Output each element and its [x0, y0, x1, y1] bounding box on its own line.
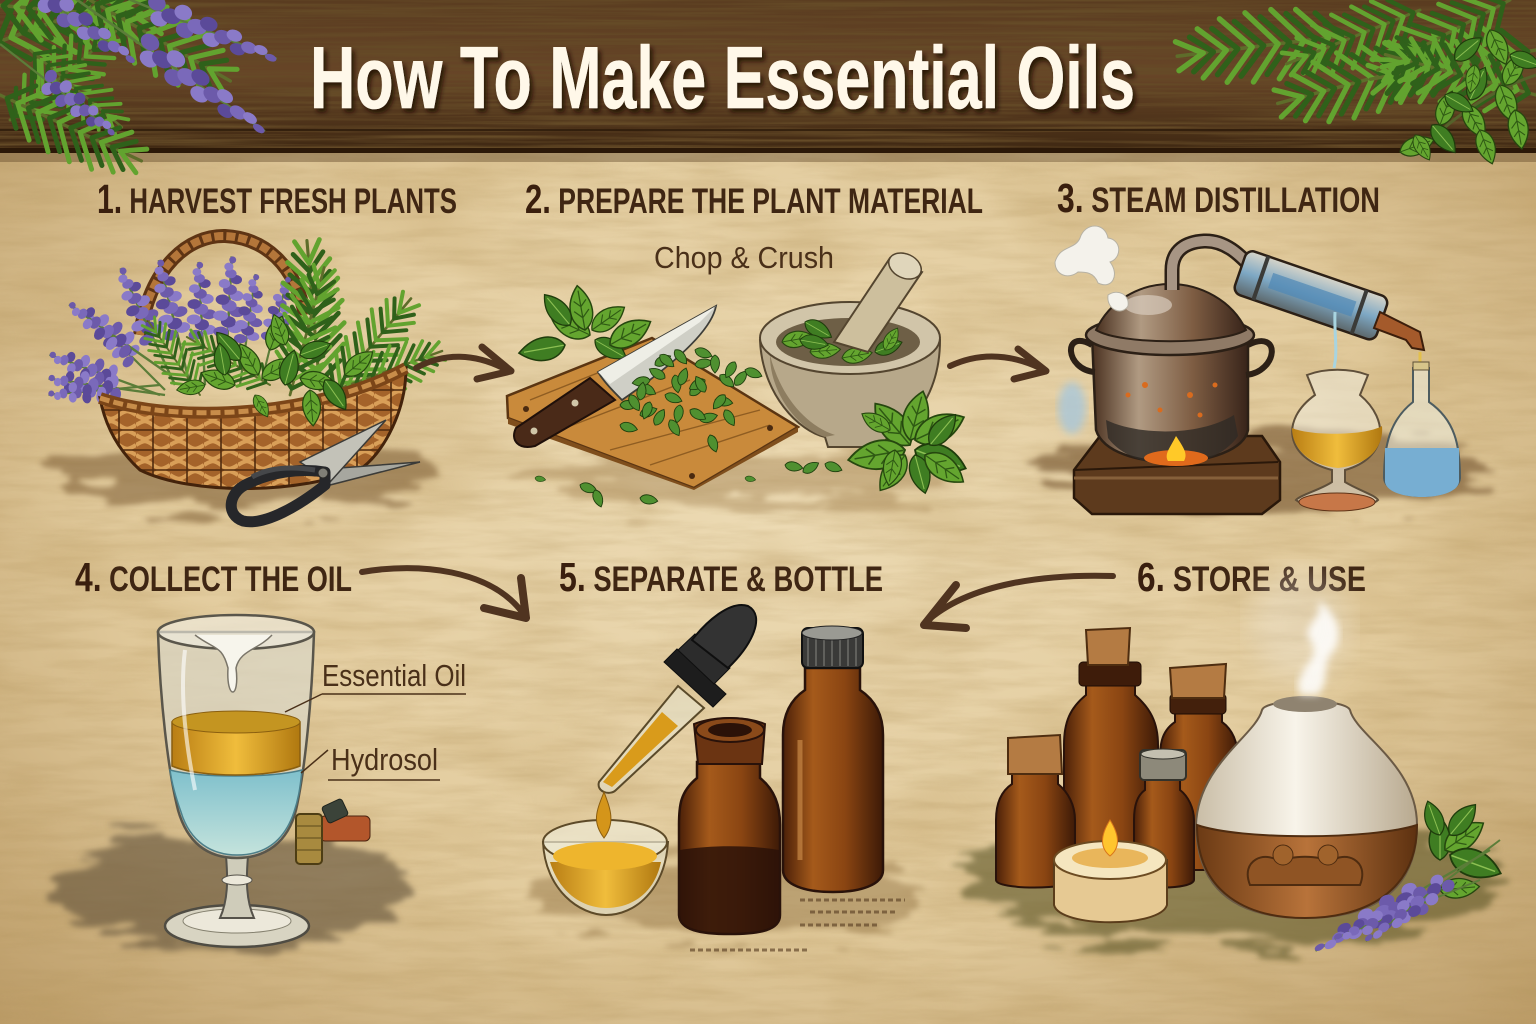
foliage: top left lavender and rosemary: [0, 0, 283, 189]
icon: glass bowl of oil: [543, 820, 668, 915]
label: essential oil: Essential Oil: [322, 658, 466, 693]
condenser: [1233, 249, 1389, 341]
top-left basil sprig: [517, 284, 656, 365]
icon: lavender and leaves at the diffuser: [1309, 798, 1507, 962]
blue flask: [1384, 362, 1460, 497]
swan neck pipe: [1172, 241, 1252, 290]
heading: step 6: 6. STORE & USE: [1137, 554, 1366, 600]
essential oil layer: [172, 713, 300, 775]
back right bottle: [1160, 664, 1238, 870]
icon: tall amber bottle with cap: [783, 626, 883, 892]
glass body: [158, 632, 314, 858]
small front bottle: [1134, 749, 1194, 888]
icon: writing scratches under the bottles: [690, 900, 905, 950]
heading: step 5: 5. SEPARATE & BOTTLE: [559, 554, 883, 600]
yellow flask: [1292, 370, 1382, 511]
wooden burner base: [1074, 436, 1280, 514]
icon: garden shears: [231, 420, 420, 522]
flame: [1144, 450, 1208, 466]
glass stem: [220, 856, 254, 918]
rosemary bunch: [134, 238, 450, 411]
handles: [1071, 341, 1272, 375]
icon: dropper: [596, 605, 756, 838]
front left bottle: [996, 735, 1075, 888]
heading: step 2: 2. PREPARE THE PLANT MATERIAL: [525, 176, 983, 222]
arrow: step 2 to step 3: [950, 349, 1046, 379]
pot rim and dome lid: [1086, 315, 1254, 355]
steam puff: [1055, 226, 1128, 311]
basket handle: [140, 236, 305, 335]
blue glow at pot side: [1058, 382, 1086, 434]
icon: lit candle: [1054, 820, 1167, 922]
heading: step 1: 1. HARVEST FRESH PLANTS: [97, 176, 457, 222]
label: hydrosol: [301, 742, 440, 780]
knife: [598, 306, 716, 400]
label: hydrosol: Hydrosol: [331, 742, 438, 777]
basil leaves in basket: [175, 312, 378, 427]
icon: separating glass: [158, 615, 314, 947]
title: How To Make Essential Oils: [310, 28, 1135, 127]
wooden title banner: [0, 0, 1536, 162]
basket body: [100, 368, 406, 489]
arrow: step 4 to step 5: [362, 568, 526, 618]
lavender bunch: [45, 256, 300, 409]
glass base: [165, 905, 309, 947]
sub-label: chop and crush: Chop & Crush: [654, 240, 834, 275]
icon: small vials beside the glass: [296, 798, 370, 864]
dripping liquid: [1334, 312, 1336, 368]
foliage: top right rosemary and leaves: [1173, 0, 1536, 167]
icon: steam distillation apparatus: [1055, 226, 1460, 514]
arrow: step 1 to step 2: [416, 347, 511, 379]
icon: mortar and pestle: [760, 248, 940, 447]
label: essential oil: [285, 658, 466, 712]
copper spout: [1374, 312, 1424, 350]
glass rim and drip: [158, 615, 314, 649]
icon: corked amber bottles group: [996, 628, 1238, 888]
arrow: step 6 to step 5: [924, 576, 1113, 628]
heading: step 4: 4. COLLECT THE OIL: [75, 554, 352, 600]
pot: [1092, 335, 1248, 462]
hydrosol layer: [170, 770, 302, 855]
tall centre bottle: [1064, 628, 1158, 870]
chopped herbs: [619, 346, 763, 453]
icon: harvest basket with herbs: [45, 236, 450, 489]
icon: aroma diffuser with mist: [1196, 570, 1417, 918]
ground stains under the illustrations: [55, 432, 1500, 950]
heading: step 3: 3. STEAM DISTILLATION: [1057, 175, 1380, 221]
icon: cutting board, knife and chopped herbs: [507, 284, 798, 490]
icon: dark amber bottle: [679, 718, 780, 934]
icon: loose basil and scattered leaves: [535, 388, 970, 508]
